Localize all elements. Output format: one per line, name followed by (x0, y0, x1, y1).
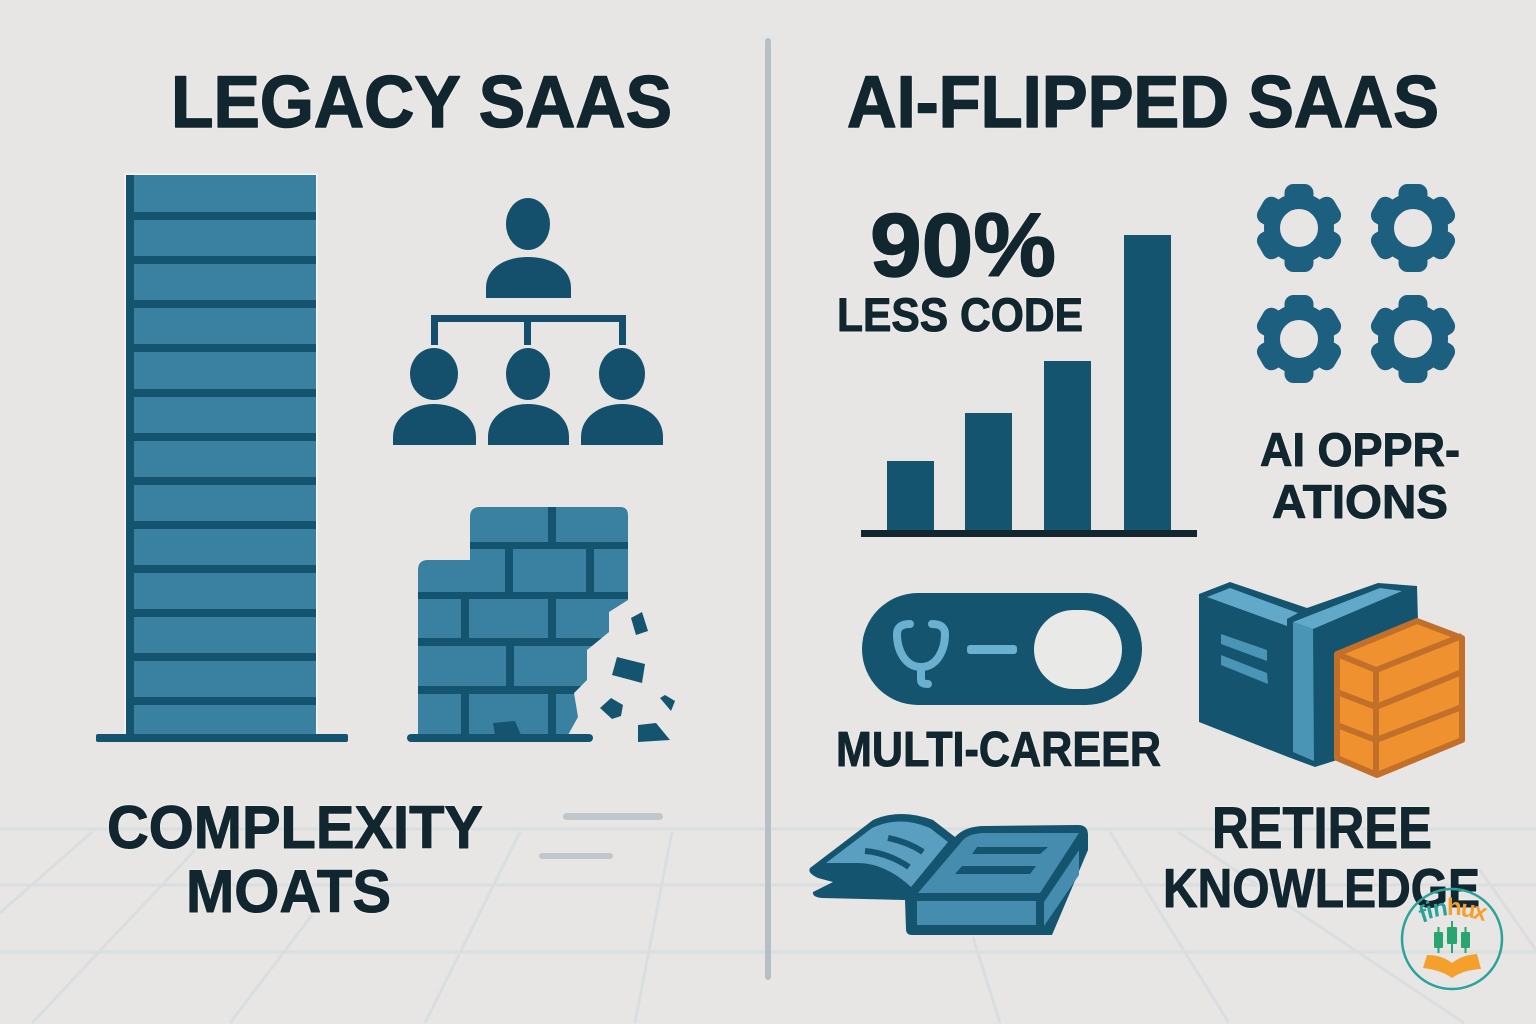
logo: finhux: f (1416, 900, 1432, 929)
icon: book and orange box (1199, 582, 1462, 775)
icon: open book (809, 814, 1088, 935)
icon: gear 1 (1254, 184, 1344, 272)
label: ai operations (1260, 423, 1460, 528)
logo: finhux (1402, 889, 1502, 989)
center divider (765, 38, 771, 980)
stat: 90% less code: LESS CODE (837, 288, 1083, 341)
label: retiree knowledge (1163, 796, 1480, 919)
icon: gear 3 (1254, 295, 1344, 383)
icon: org chart (393, 198, 663, 445)
label: multi-career: MULTI-CAREER (836, 723, 1161, 777)
stat: 90% less code: 90% (870, 196, 1056, 296)
icon: tall layered tower (96, 174, 348, 742)
label: ai operations: AI OPPR- (1260, 423, 1460, 476)
label: retiree knowledge: RETIREE (1212, 796, 1432, 861)
motion dashes (539, 813, 663, 859)
logo: finhux: u (1459, 895, 1477, 924)
logo: finhux: i (1423, 897, 1436, 925)
label: complexity moats: MOATS (186, 858, 391, 925)
logo: finhux: x (1471, 898, 1491, 927)
icon: crumbling brick wall (407, 505, 675, 742)
heading: ai-flipped saas: AI-FLIPPED SAAS (847, 62, 1439, 143)
icon: gear 4 (1368, 295, 1458, 383)
label: retiree knowledge: KNOWLEDGE (1163, 857, 1480, 919)
logo: finhux: h (1447, 894, 1462, 921)
stat: 90% less code (837, 196, 1083, 341)
label: complexity moats: COMPLEXITY (107, 794, 483, 861)
label: complexity moats (107, 794, 483, 925)
icon: four gears (1254, 184, 1458, 383)
label: ai operations: ATIONS (1272, 475, 1448, 528)
heading: legacy saas: LEGACY SAAS (171, 62, 672, 143)
logo: finhux: n (1431, 894, 1449, 923)
icon: gear 2 (1368, 184, 1458, 272)
icon: career toggle with stethoscope (862, 593, 1142, 705)
bar chart (861, 235, 1197, 537)
